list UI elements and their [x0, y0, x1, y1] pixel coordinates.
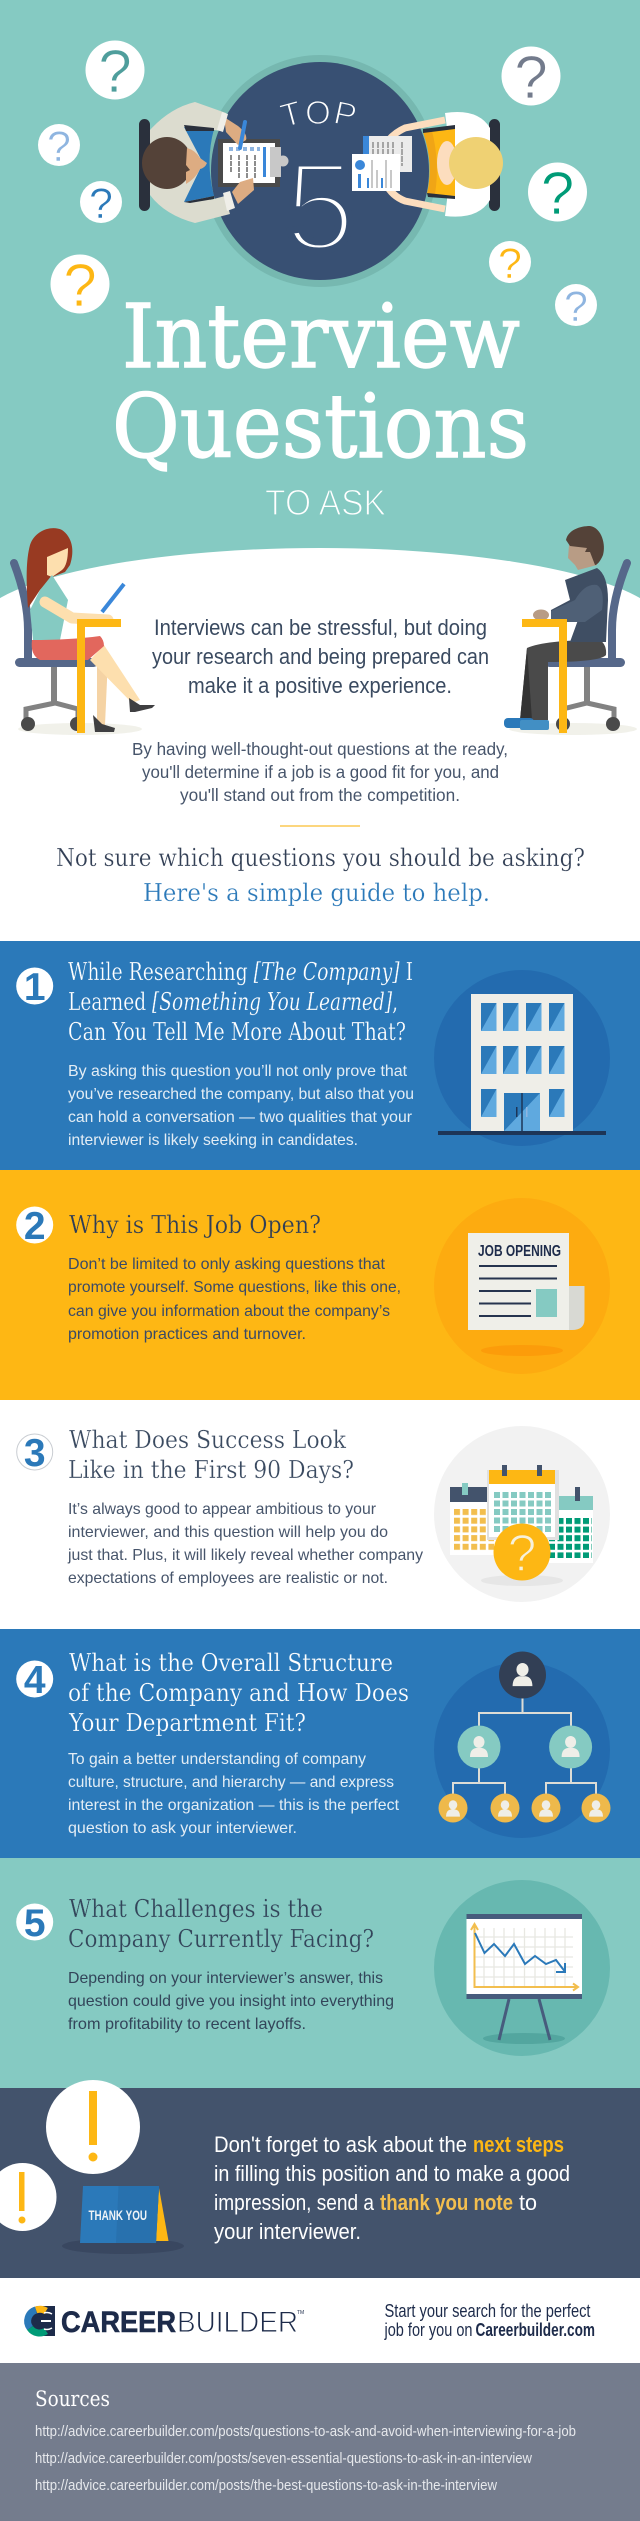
question mark bubbles: ?	[89, 180, 113, 228]
heading: While Researching [The Company] I	[68, 958, 413, 986]
heading: Can You Tell Me More About That?	[68, 1018, 406, 1046]
body: expectations of employees are realistic or not.	[68, 1570, 388, 1587]
number badge 3	[17, 1432, 53, 1475]
guide answer: Here's a simple guide to help.	[143, 879, 490, 907]
body: By asking this question you’ll not only prove that	[68, 1063, 408, 1080]
number badge 3: 3	[24, 1432, 46, 1475]
question mark bubbles: ?	[98, 38, 132, 105]
intro lead text: make it a positive experience.	[188, 673, 452, 698]
number badge 5	[16, 1902, 53, 1945]
callout text: your interviewer.	[214, 2219, 361, 2244]
question mark bubbles: ?	[47, 123, 71, 171]
intro body text: By having well-thought-out questions at the ready,	[132, 739, 508, 759]
heading: Your Department Fit?	[68, 1709, 306, 1737]
heading	[68, 958, 413, 1046]
logo	[24, 2306, 304, 2339]
intro body text	[132, 739, 508, 805]
call to action: Start your search for the perfect	[384, 2301, 590, 2321]
body	[68, 1063, 414, 1149]
icon: calendars with question mark	[434, 1426, 610, 1602]
icon: office building	[434, 970, 610, 1146]
icon: declining chart on easel	[434, 1880, 610, 2056]
number badge 1	[16, 966, 53, 1009]
table with ring	[204, 55, 436, 287]
source links: http://advice.careerbuilder.com/posts/questions-to-ask-and-avoid-when-interviewing-for-a-job	[35, 2424, 576, 2440]
panel: sources	[0, 2363, 640, 2521]
body: can give you information about the company’s	[68, 1303, 390, 1320]
body: Depending on your interviewer’s answer, this	[68, 1970, 383, 1987]
number badge 5: 5	[24, 1902, 46, 1945]
number badge 4	[16, 1659, 53, 1702]
intro lead text: your research and being prepared can	[152, 644, 489, 669]
body	[67, 1501, 423, 1587]
body: It’s always good to appear ambitious to your	[68, 1501, 377, 1518]
body: promotion practices and turnover.	[68, 1326, 306, 1343]
heading: Company Currently Facing?	[68, 1925, 374, 1953]
heading: of the Company and How Does	[68, 1679, 409, 1707]
intro lead text: Interviews can be stressful, but doing	[154, 615, 487, 640]
callout text: next steps	[473, 2132, 564, 2157]
heading: Learned [Something You Learned],	[68, 988, 398, 1016]
heading: Like in the First 90 Days?	[68, 1456, 354, 1484]
body: just that. Plus, it will likely reveal whether company	[67, 1547, 423, 1564]
body: interest in the organization — this is the perfect	[68, 1797, 400, 1814]
big number 5: 5	[285, 136, 355, 277]
body: interviewer is likely seeking in candidates.	[68, 1132, 358, 1149]
panel: hero	[0, 0, 640, 640]
source links: http://advice.careerbuilder.com/posts/the-best-questions-to-ask-in-the-interview	[35, 2478, 497, 2494]
source links: http://advice.careerbuilder.com/posts/seven-essential-questions-to-ask-in-an-interview	[35, 2451, 532, 2467]
question mark bubbles: ?	[541, 160, 574, 227]
call to action	[384, 2301, 595, 2340]
source links	[35, 2424, 576, 2494]
icon: job opening newspaper	[434, 1198, 610, 1374]
callout text: thank you note	[380, 2190, 513, 2215]
title: Questions	[112, 375, 529, 478]
panel: question 4	[0, 1629, 640, 1858]
panel: footer brand	[0, 2278, 640, 2363]
heading	[68, 1426, 354, 1484]
body: from profitability to recent layoffs.	[68, 2016, 306, 2033]
heading: What Does Success Look	[69, 1426, 346, 1454]
callout text	[214, 2132, 570, 2244]
panel: intro	[0, 526, 640, 941]
call to action: job for you on	[384, 2320, 472, 2340]
top label: P	[331, 93, 360, 134]
logo: CAREER	[61, 2306, 176, 2339]
heading: Why is This Job Open?	[69, 1211, 321, 1239]
callout text: in filling this position and to make a good	[214, 2161, 570, 2186]
panel: question 1	[0, 941, 640, 1170]
guide question: Not sure which questions you should be asking?	[56, 844, 585, 872]
logo: BUILDER	[177, 2306, 298, 2339]
heading: What Challenges is the	[69, 1895, 323, 1923]
icon: thank you card: THANK YOU	[88, 2207, 147, 2223]
body: question could give you insight into everything	[68, 1993, 394, 2010]
intro lead text	[152, 615, 489, 698]
illustration: woman at desk	[14, 528, 155, 735]
heading: What is the Overall Structure	[69, 1649, 393, 1677]
heading	[68, 1895, 374, 1953]
panel: next steps callout	[0, 2080, 640, 2278]
number badge 1: 1	[24, 966, 46, 1009]
title	[112, 285, 529, 478]
body: question to ask your interviewer.	[68, 1820, 297, 1837]
number badge 2: 2	[24, 1205, 46, 1248]
icon: interviewer top view	[139, 102, 288, 223]
question mark bubbles: ?	[514, 44, 548, 111]
icon: candidate top view	[352, 112, 503, 217]
icon: calendars with question mark: ?	[508, 1525, 536, 1583]
heading	[68, 1649, 409, 1737]
intro body text: you'll stand out from the competition.	[180, 785, 460, 805]
icon: thank you card	[62, 2186, 184, 2254]
sources heading: Sources	[35, 2387, 110, 2411]
body: interviewer, and this question will help you do	[68, 1524, 388, 1541]
body	[68, 1751, 400, 1837]
top label	[276, 93, 360, 134]
body: To gain a better understanding of company	[68, 1751, 366, 1768]
callout text: to	[519, 2190, 537, 2215]
icon: job opening newspaper: JOB OPENING	[478, 1243, 561, 1260]
question mark bubbles: ?	[63, 252, 97, 319]
number badge 2	[16, 1205, 53, 1248]
question mark bubbles: ?	[564, 283, 588, 331]
illustration: man at desk	[504, 526, 637, 735]
number badge 4: 4	[24, 1659, 46, 1702]
logo: TM	[297, 2310, 304, 2316]
panel: question 2	[0, 1170, 640, 1400]
question mark bubbles	[38, 38, 597, 331]
intro body text: you'll determine if a job is a good fit for you, and	[142, 762, 499, 782]
body: Don’t be limited to only asking questions that	[68, 1256, 386, 1273]
body: promote yourself. Some questions, like this one,	[68, 1279, 401, 1296]
body	[68, 1970, 394, 2033]
body	[68, 1256, 401, 1343]
panel: question 5	[0, 1858, 640, 2088]
body: can hold a conversation — two qualities that your	[68, 1109, 413, 1126]
icon: org chart	[434, 1652, 610, 1838]
callout text: impression, send a	[214, 2190, 375, 2215]
top label: O	[305, 94, 331, 131]
body: you’ve researched the company, but also that you	[68, 1086, 414, 1103]
icon: exclamation bubbles	[0, 2080, 140, 2231]
call to action: Careerbuilder.com	[476, 2320, 595, 2340]
callout text: Don't forget to ask about the	[214, 2132, 467, 2157]
question mark bubbles: ?	[498, 240, 522, 288]
body: culture, structure, and hierarchy — and express	[68, 1774, 394, 1791]
subtitle: TO ASK	[265, 482, 386, 523]
title: Interview	[122, 285, 520, 388]
top label: T	[276, 93, 306, 134]
panel: question 3	[0, 1400, 640, 1629]
